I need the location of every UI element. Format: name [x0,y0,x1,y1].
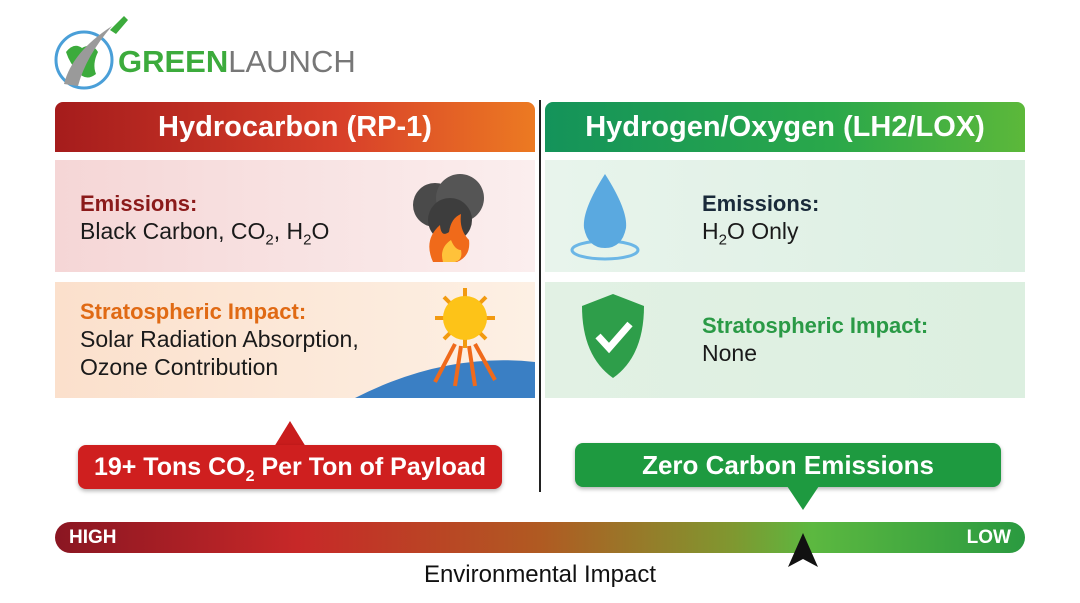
icon: smoke and fire [413,174,484,262]
heading: hydrocarbon: Hydrocarbon (RP-1) [158,111,432,143]
divider [539,100,541,492]
stratospheric block: Stratospheric Impact: [702,313,928,338]
logo [54,16,356,90]
stratospheric block [545,282,1025,398]
stratospheric block: Solar Radiation Absorption, [80,326,359,352]
emissions block: Emissions: [702,191,819,216]
impact scale bar: HIGH [69,527,116,548]
heading: hydrogen [545,102,1025,152]
marker arrow [788,533,818,567]
heading: hydrocarbon [55,102,535,152]
icon: water drop [570,174,640,260]
brand name: GREENLAUNCH [118,44,356,79]
impact scale bar [55,522,1025,553]
heading: hydrogen: Hydrogen/Oxygen (LH2/LOX) [585,111,985,143]
emissions block: H2O Only [702,218,799,249]
stratospheric block: Stratospheric Impact: [80,299,306,324]
callout: 19+ tons: 19+ Tons CO2 Per Ton of Payload [94,453,486,485]
icon: shield check [582,294,644,378]
stratospheric block: None [702,340,757,366]
emissions block: Black Carbon, CO2, H2O [80,218,329,249]
callout: 19+ tons [76,421,504,494]
emissions block [55,160,535,272]
callout: zero carbon [572,442,1004,510]
icon: globe with rocket [56,16,128,88]
icon: sun over earth [355,288,535,398]
panel: hydrogen [545,102,1025,398]
stratospheric block [55,282,535,398]
emissions block: Emissions: [80,191,197,216]
scale label: Environmental Impact [424,561,656,588]
impact scale bar: LOW [967,527,1011,548]
callout: zero carbon: Zero Carbon Emissions [642,450,934,480]
panel: hydrocarbon [55,102,535,398]
emissions block [545,160,1025,272]
stratospheric block: Ozone Contribution [80,354,278,380]
